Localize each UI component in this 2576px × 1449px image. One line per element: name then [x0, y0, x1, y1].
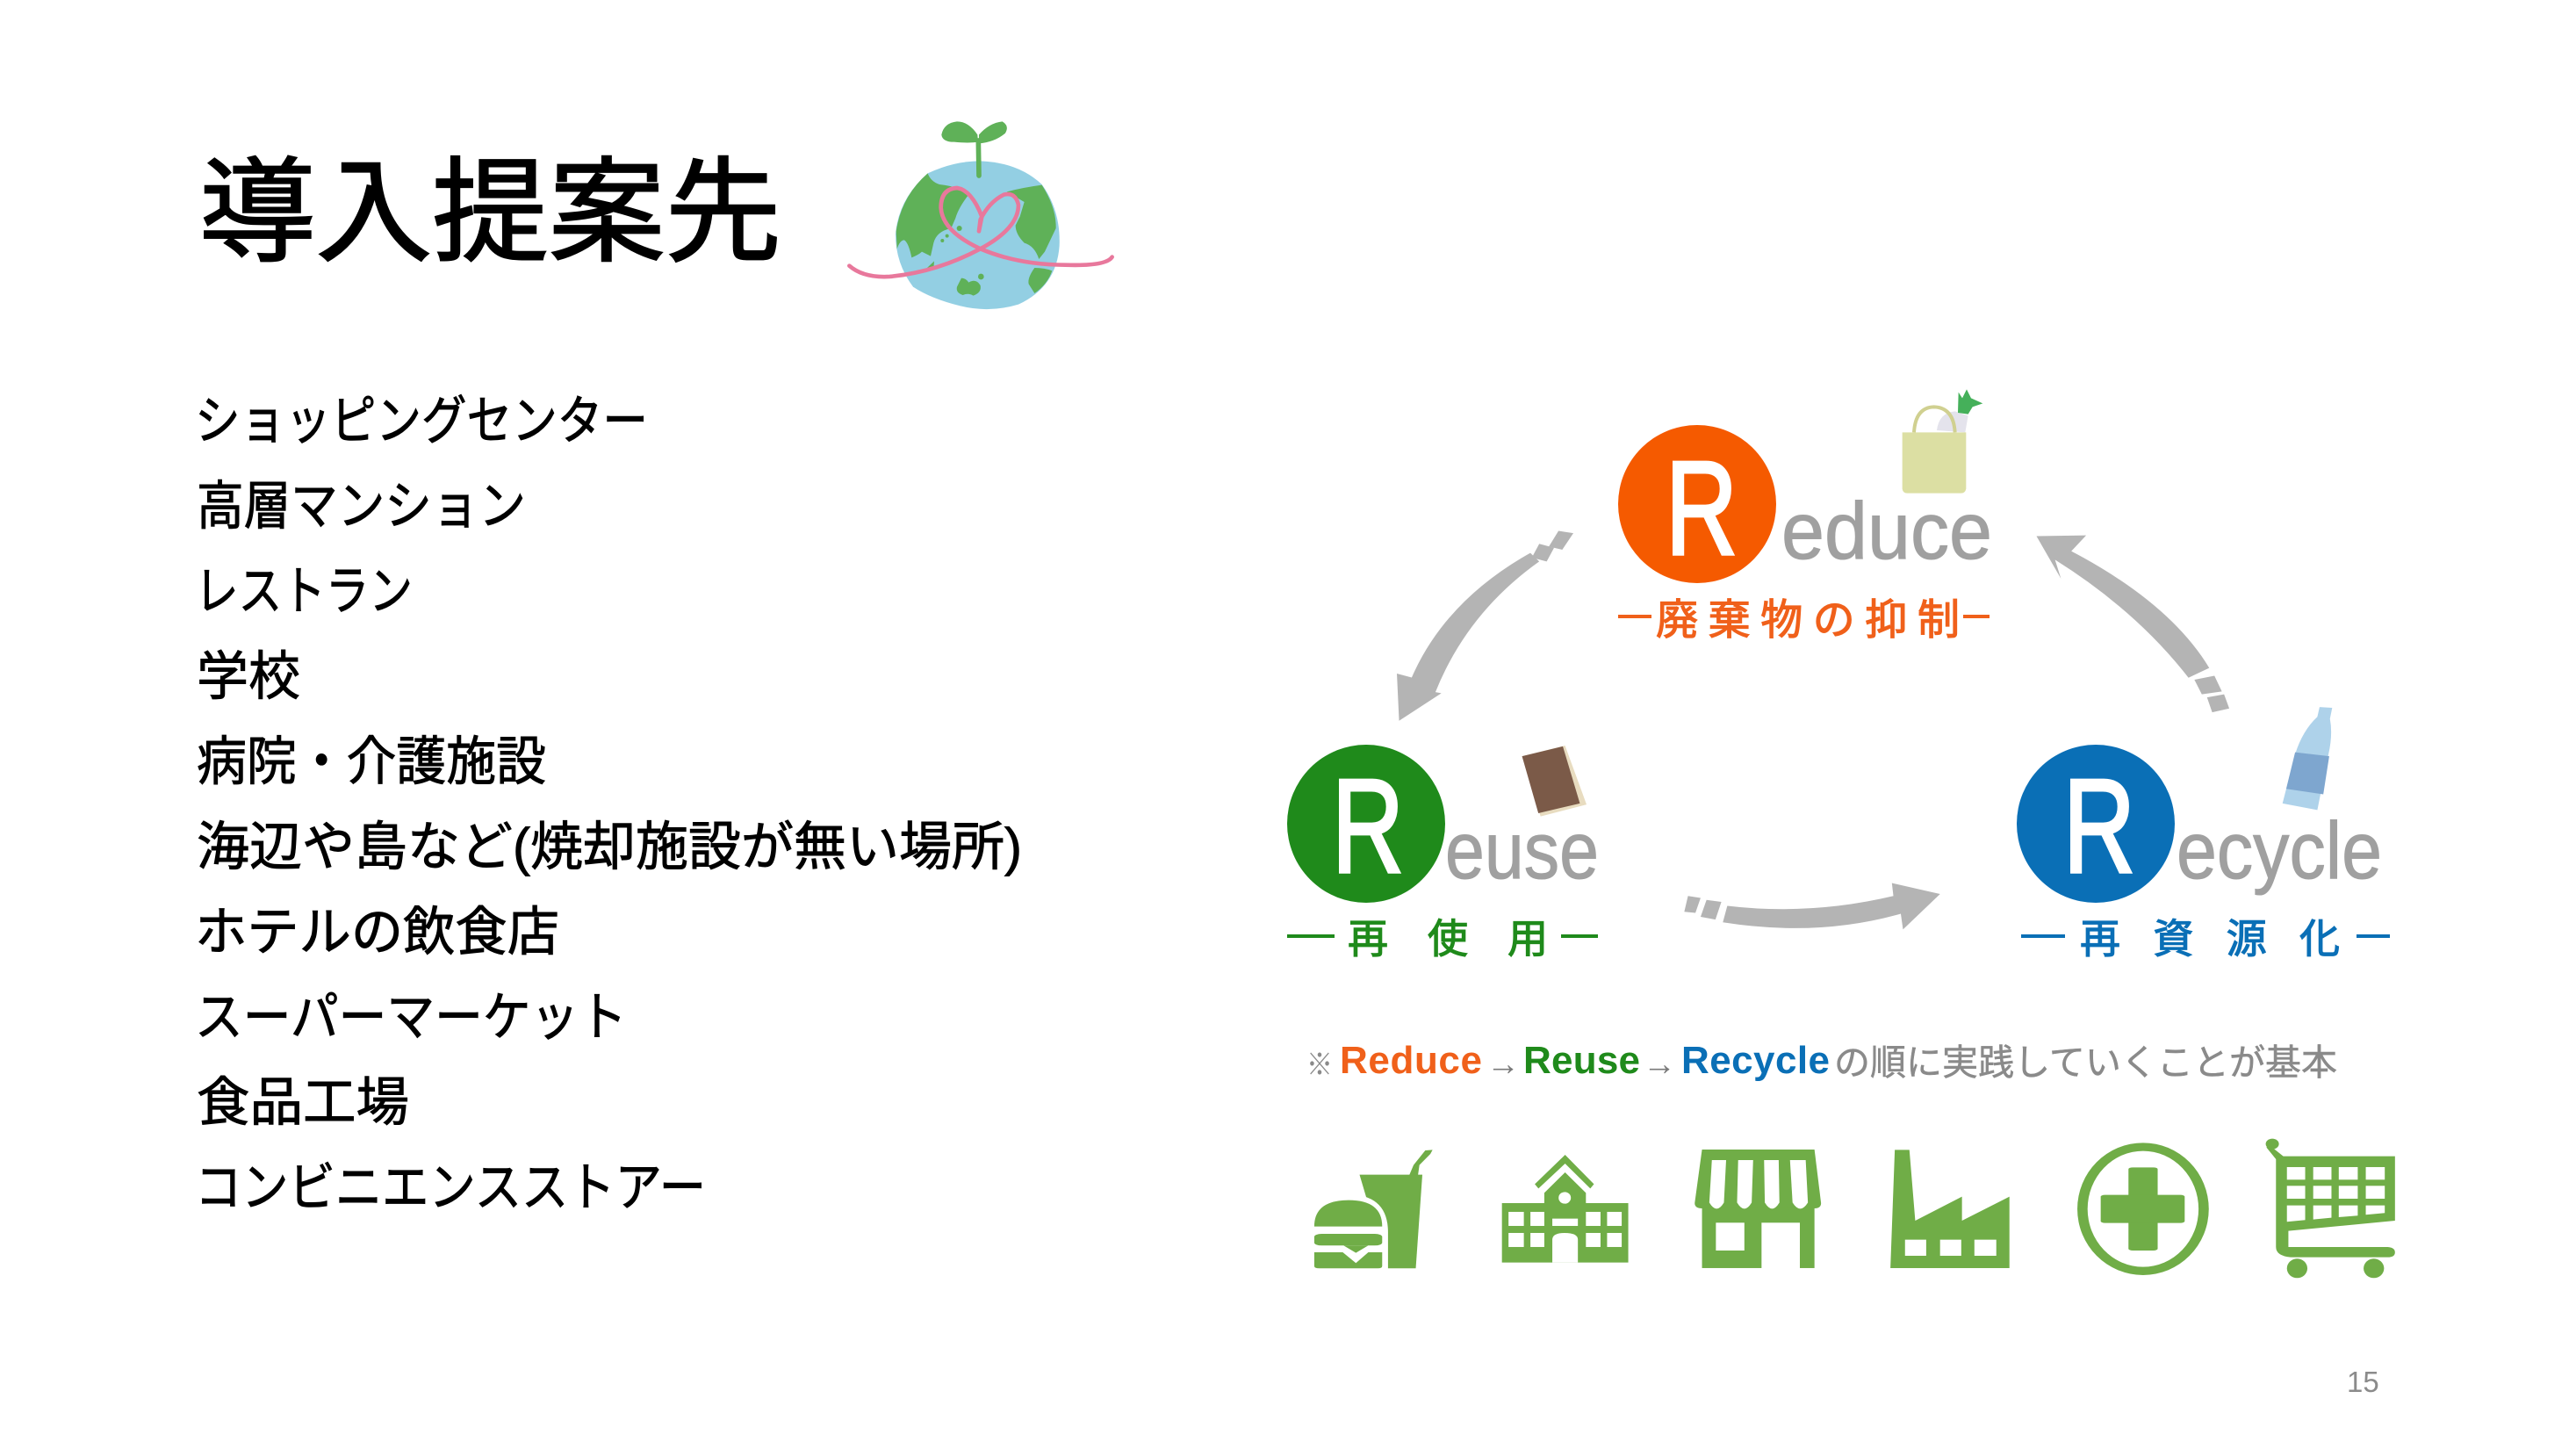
word euse: euse	[1445, 806, 1599, 896]
reduce block	[1618, 389, 1992, 644]
note: practice order	[1306, 1039, 2337, 1083]
icon: orange R circle	[1618, 425, 1776, 583]
icon: medical cross	[2077, 1143, 2209, 1275]
list item: レストラン	[195, 562, 413, 621]
list item: スーパーマーケット	[195, 988, 627, 1047]
note: practice order: Reduce	[1340, 1039, 1482, 1082]
arrow: reuse to recycle	[1684, 883, 1940, 929]
icon: earth with sprout and heart ribbon	[849, 121, 1112, 309]
note: practice order: ※	[1306, 1049, 1333, 1082]
reuse block	[1287, 745, 1599, 962]
list item: ホテルの飲食店	[195, 903, 559, 962]
icon: plastic bottle	[2283, 707, 2332, 810]
icon: factory	[1890, 1150, 2010, 1268]
icon: shopping cart	[2266, 1139, 2395, 1278]
list item: 食品工場	[197, 1073, 409, 1132]
note: practice order: Reuse	[1523, 1039, 1640, 1082]
note: practice order: の順に実践していくことが基本	[1834, 1042, 2337, 1083]
subtitle: reuse	[1287, 916, 1598, 962]
note: practice order: →	[1486, 1046, 1520, 1083]
word ecycle: ecycle	[2177, 806, 2382, 896]
list item: コンビニエンスストアー	[195, 1158, 706, 1217]
letter R: R	[1666, 434, 1738, 583]
icon: storefront	[1695, 1150, 1821, 1269]
icon: shopping bag	[1903, 389, 1982, 494]
list item: ショッピングセンター	[195, 392, 648, 451]
icon: burger and drink	[1305, 1150, 1433, 1271]
note: practice order: →	[1643, 1046, 1676, 1083]
title: 導入提案先	[199, 148, 781, 277]
diagram: 3R cycle	[1287, 389, 2390, 962]
list item: 海辺や島など(焼却施設が無い場所)	[197, 818, 1022, 876]
icon: school	[1502, 1155, 1629, 1263]
subtitle: reuse: 再使用	[1348, 916, 1548, 962]
letter R: R	[2063, 752, 2135, 901]
icon: book	[1522, 746, 1587, 817]
subtitle: recycle: 再資源化	[2080, 916, 2340, 962]
letter R: R	[1332, 752, 1404, 901]
list item: 学校	[197, 647, 300, 706]
arrow: reduce to reuse	[1397, 530, 1573, 721]
list of proposal destinations	[195, 392, 1022, 1217]
word educe: educe	[1781, 487, 1992, 576]
note: practice order: Recycle	[1681, 1039, 1830, 1082]
page number: 15	[2347, 1366, 2379, 1398]
icon row	[1305, 1139, 2395, 1278]
recycle block	[2017, 707, 2390, 962]
icon: green R circle	[1287, 745, 1445, 903]
list item: 病院・介護施設	[197, 732, 546, 791]
subtitle: reduce: 廃棄物の抑制	[1656, 597, 1960, 644]
list item: 高層マンション	[197, 477, 526, 536]
arrow: recycle to reduce	[2037, 536, 2229, 712]
icon: blue R circle	[2017, 745, 2175, 903]
